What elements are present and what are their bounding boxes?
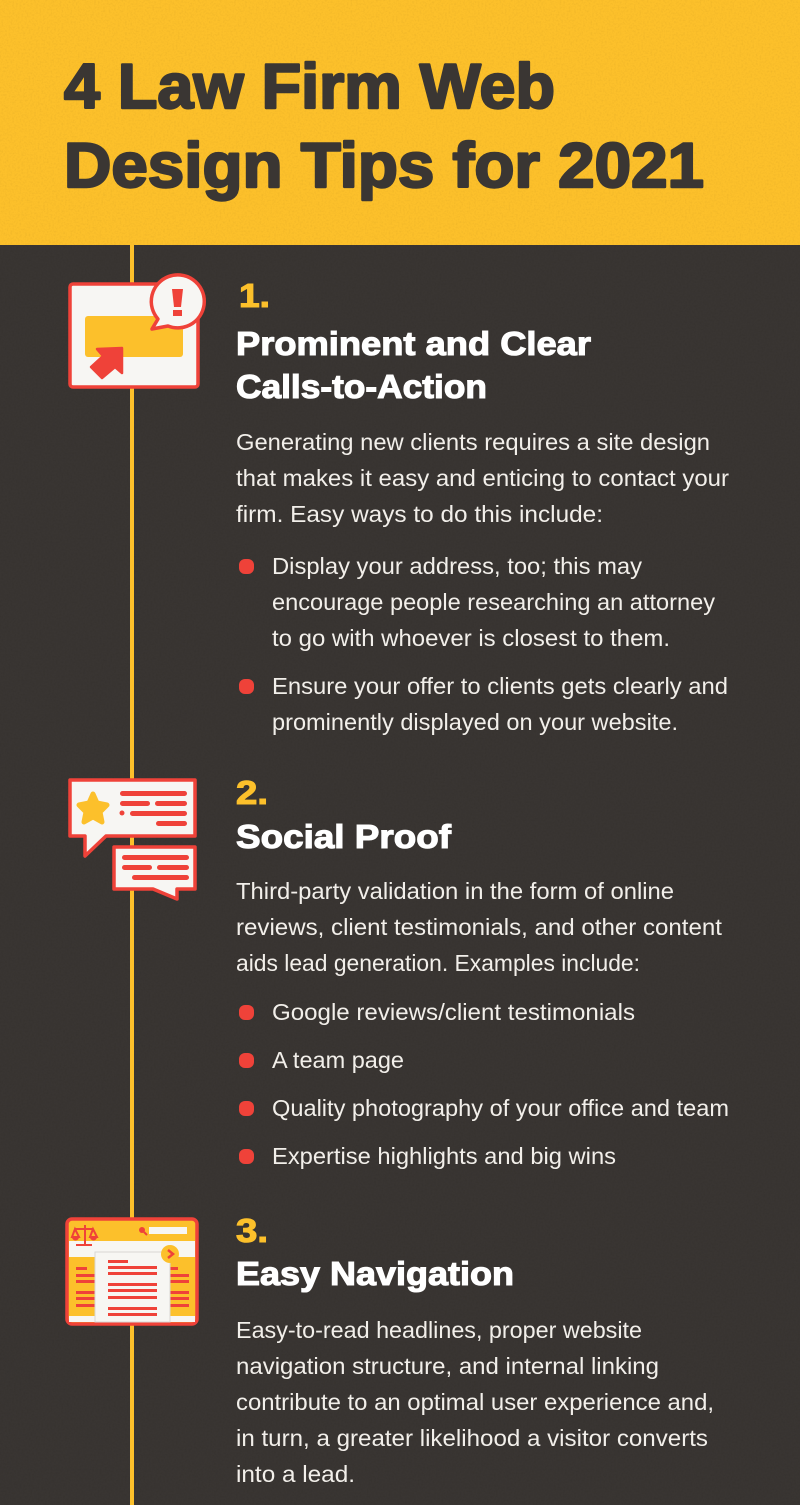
step 3 body text — [236, 1317, 714, 1487]
step 3 body text: navigation structure, and internal linking — [236, 1353, 659, 1379]
step 3 body text: Easy-to-read headlines, proper website — [236, 1317, 642, 1343]
step 1 bullet list — [239, 553, 728, 735]
step 3 heading: Easy Navigation — [236, 1255, 514, 1292]
step 3 body text: in turn, a greater likelihood a visitor converts — [236, 1425, 708, 1451]
header banner — [0, 0, 800, 245]
step 1 intro text: Generating new clients requires a site design — [236, 429, 710, 455]
step 3 body text: contribute to an optimal user experience and, — [236, 1389, 714, 1415]
step 3 heading: 3. — [236, 1212, 268, 1249]
step 2 intro text: aids lead generation. Examples include: — [236, 950, 640, 976]
step 2 bullet list: A team page — [272, 1047, 404, 1073]
step 1 intro text: firm. Easy ways to do this include: — [236, 501, 603, 527]
step 2 heading: 2. — [236, 774, 268, 811]
step 2 bullet list — [239, 999, 729, 1169]
title: 4 Law Firm Web — [64, 52, 555, 122]
step 1 bullet list: Ensure your offer to clients gets clearly and — [272, 673, 728, 699]
step 3 body text: into a lead. — [236, 1461, 355, 1487]
step 3 heading — [236, 1212, 514, 1292]
step 1 bullet list: Display your address, too; this may — [272, 553, 643, 579]
icon: website navigation — [67, 1219, 197, 1324]
step 1 bullet list: to go with whoever is closest to them. — [272, 625, 670, 651]
step 1 heading: Calls-to-Action — [236, 368, 487, 405]
step 1 bullet list: encourage people researching an attorney — [272, 589, 716, 615]
title — [64, 52, 704, 201]
step 2 bullet list: Quality photography of your office and team — [272, 1095, 729, 1121]
step 2 heading — [236, 774, 452, 855]
step 2 intro text — [236, 878, 723, 976]
icon: review speech bubbles — [70, 780, 195, 899]
step 1 heading — [236, 277, 591, 405]
title: Design Tips for 2021 — [64, 131, 704, 201]
step 1 bullet list: prominently displayed on your website. — [272, 709, 678, 735]
step 2 bullet list: Google reviews/client testimonials — [272, 999, 635, 1025]
step 2 bullet list: Expertise highlights and big wins — [272, 1143, 616, 1169]
step 2 intro text: reviews, client testimonials, and other content — [236, 914, 723, 940]
icon: call to action — [70, 275, 204, 387]
timeline line — [130, 245, 134, 1505]
step 1 intro text: that makes it easy and enticing to contact your — [236, 465, 729, 491]
step 2 heading: Social Proof — [236, 818, 452, 855]
step 1 heading: Prominent and Clear — [236, 325, 591, 362]
step 1 heading: 1. — [239, 277, 270, 314]
step 2 intro text: Third-party validation in the form of online — [236, 878, 674, 904]
step 1 intro text — [236, 429, 729, 527]
